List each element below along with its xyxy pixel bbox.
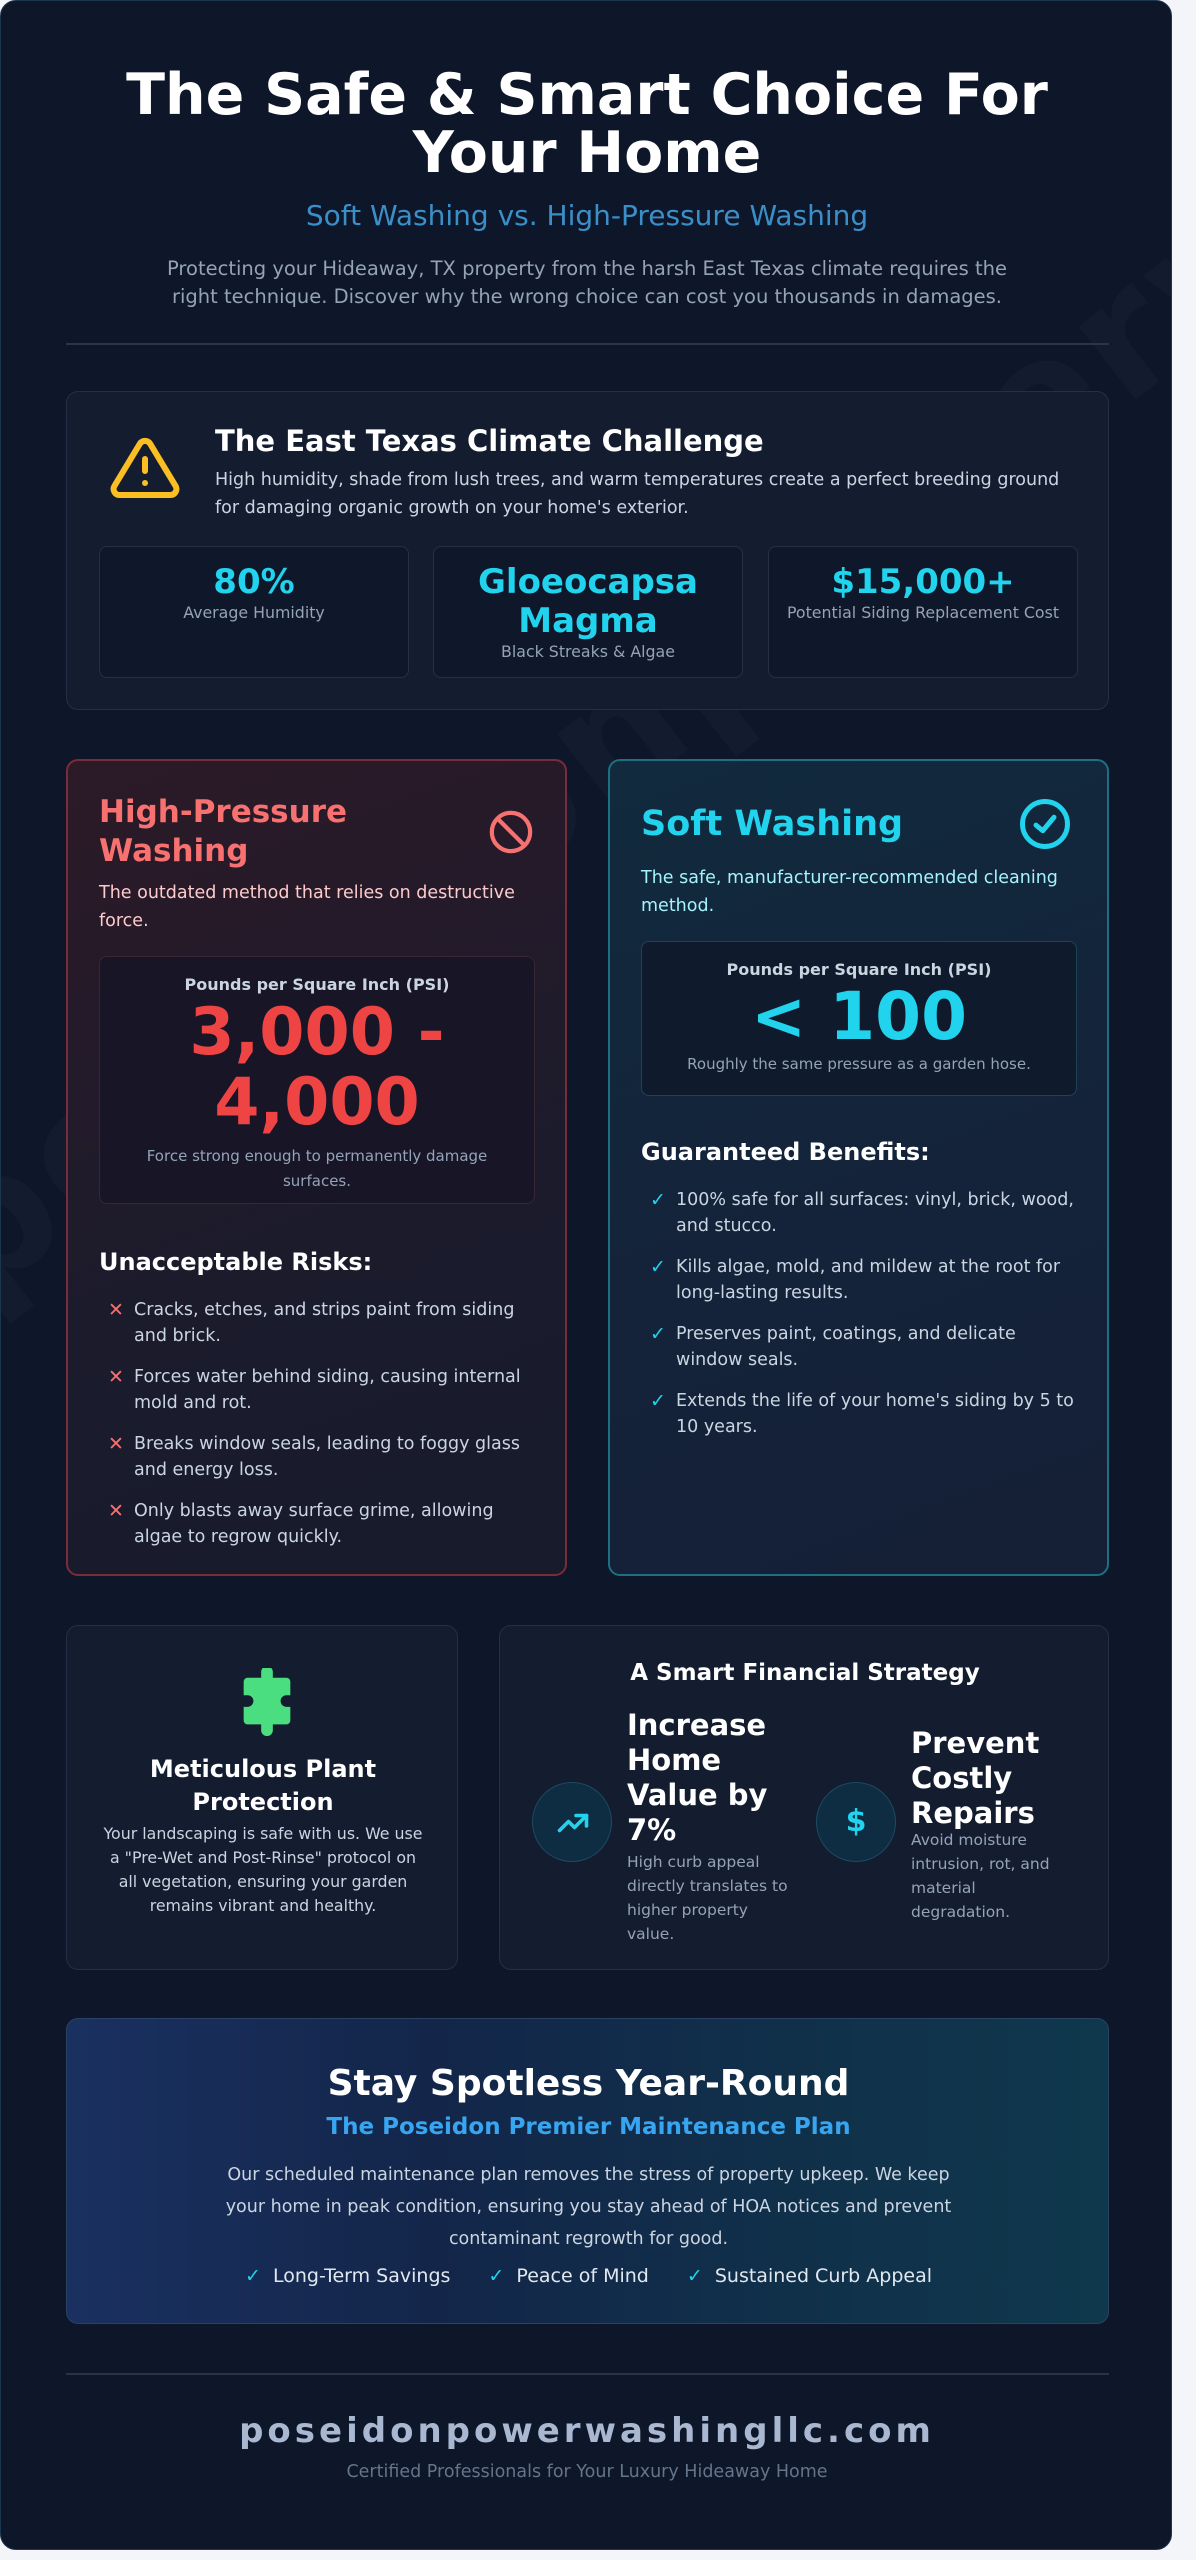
- panel: plant protection: [66, 1625, 458, 1970]
- icon: ban: [490, 810, 532, 854]
- intro paragraph: Protecting your Hideaway, TX property from the harsh East Texas climate requires the right technique. Discover why the wrong choice can cost you thousands in damages.: [167, 257, 1007, 308]
- heading: Meticulous Plant: [150, 1755, 376, 1783]
- benefits list: ✓: [650, 1189, 666, 1211]
- PSI box: [99, 956, 535, 1204]
- risks list: Only blasts away surface grime, allowing algae to regrow quickly.: [134, 1501, 494, 1547]
- benefits list: ✓: [650, 1256, 666, 1278]
- PSI box: Force strong enough to permanently damage surfaces.: [147, 1147, 487, 1190]
- panel: financial strategy: [499, 1625, 1109, 1970]
- benefits checks: ✓ Peace of Mind: [488, 2265, 649, 2287]
- item: increase value: Increase Home Value by 7%: [627, 1708, 767, 1847]
- benefits checks: ✓ Long-Term Savings: [245, 2265, 450, 2287]
- risks list: Breaks window seals, leading to foggy glass and energy loss.: [134, 1434, 520, 1480]
- icon: puzzle: [244, 1668, 290, 1736]
- benefits heading: Guaranteed Benefits:: [641, 1138, 930, 1166]
- benefits list: ✓: [650, 1390, 666, 1412]
- stat: humidity: 80%: [213, 562, 295, 602]
- icon: dollar: $: [846, 1804, 866, 1839]
- description: The outdated method that relies on destructive force.: [99, 883, 515, 931]
- item: prevent repairs: [816, 1726, 1050, 1921]
- benefits list: 100% safe for all surfaces: vinyl, brick, wood, and stucco.: [676, 1190, 1074, 1236]
- item: increase value: High curb appeal directly translates to higher property value.: [627, 1853, 788, 1943]
- heading: Stay Spotless Year-Round: [328, 2063, 849, 2104]
- benefits checks: ✓ Sustained Curb Appeal: [687, 2265, 932, 2287]
- title: Your Home: [413, 120, 761, 186]
- heading: High-Pressure: [99, 794, 347, 830]
- description: The safe, manufacturer-recommended cleaning method.: [641, 868, 1058, 916]
- risks list: ✕: [108, 1433, 124, 1455]
- risks list: ✕: [108, 1366, 124, 1388]
- icon: warning: [110, 438, 180, 498]
- item: prevent repairs: Avoid moisture intrusion, rot, and material degradation.: [911, 1831, 1050, 1921]
- title: The Safe & Smart Choice For: [126, 62, 1048, 128]
- footer website: poseidonpowerwashingllc.com: [239, 2411, 935, 2451]
- description: High humidity, shade from lush trees, and warm temperatures create a perfect breeding ground for damaging organic growth on your home's exterior.: [215, 470, 1059, 518]
- benefits list: Extends the life of your home's siding by 5 to 10 years.: [676, 1391, 1074, 1437]
- panel: high-pressure washing: [66, 759, 567, 1576]
- stat: cost: $15,000+: [831, 562, 1015, 602]
- risks list: ✕: [108, 1500, 124, 1522]
- subtitle: Soft Washing vs. High-Pressure Washing: [306, 199, 868, 232]
- PSI box: 3,000 -: [189, 995, 445, 1070]
- item: increase value: [532, 1708, 788, 1943]
- heading: A Smart Financial Strategy: [630, 1660, 980, 1686]
- heading: Soft Washing: [641, 804, 903, 844]
- heading: Protection: [192, 1788, 334, 1816]
- benefits list: ✓: [650, 1323, 666, 1345]
- stat: humidity: [99, 546, 409, 678]
- PSI box: Roughly the same pressure as a garden hose.: [687, 1055, 1031, 1073]
- PSI box: < 100: [751, 978, 967, 1055]
- stat: cost: [768, 546, 1078, 678]
- PSI box: Pounds per Square Inch (PSI): [727, 960, 991, 979]
- panel: climate challenge: [66, 391, 1109, 710]
- risks heading: Unacceptable Risks:: [99, 1248, 372, 1276]
- PSI box: Pounds per Square Inch (PSI): [185, 975, 449, 994]
- risks list: ✕: [108, 1299, 124, 1321]
- stat: gloeocapsa: Gloeocapsa: [478, 562, 698, 602]
- panel: soft washing: [608, 759, 1109, 1576]
- title: [126, 62, 1048, 186]
- PSI box: [641, 941, 1077, 1096]
- benefits checks: [245, 2265, 932, 2287]
- icon: trend up: [532, 1782, 612, 1862]
- paragraph: Our scheduled maintenance plan removes the stress of property upkeep. We keep your home in peak condition, ensuring you stay ahead of HOA notices and prevent contaminant regrowth for good.: [226, 2165, 951, 2249]
- stat: humidity: Average Humidity: [183, 603, 325, 622]
- description: Your landscaping is safe with us. We use a "Pre-Wet and Post-Rinse" protocol on all vegetation, ensuring your garden remains vibrant and healthy.: [104, 1824, 422, 1915]
- stat: gloeocapsa: Black Streaks & Algae: [501, 642, 675, 661]
- stat: cost: Potential Siding Replacement Cost: [787, 603, 1059, 622]
- heading: [99, 794, 347, 869]
- benefits list: Kills algae, mold, and mildew at the root for long-lasting results.: [676, 1257, 1060, 1303]
- benefits list: Preserves paint, coatings, and delicate window seals.: [676, 1324, 1016, 1370]
- PSI box: 4,000: [214, 1065, 420, 1140]
- risks list: Cracks, etches, and strips paint from siding and brick.: [134, 1300, 514, 1346]
- footer tagline: Certified Professionals for Your Luxury Hideaway Home: [346, 2462, 828, 2482]
- heading: Washing: [99, 833, 248, 869]
- stat: gloeocapsa: Magma: [518, 601, 658, 641]
- panel: maintenance plan CTA: [66, 2018, 1109, 2324]
- stat: gloeocapsa: [433, 546, 743, 678]
- risks list: [108, 1299, 521, 1547]
- risks list: Forces water behind siding, causing internal mold and rot.: [134, 1367, 521, 1413]
- heading: [150, 1755, 376, 1816]
- subheading: The Poseidon Premier Maintenance Plan: [326, 2114, 851, 2140]
- item: prevent repairs: Prevent Costly Repairs: [911, 1726, 1039, 1830]
- benefits list: [650, 1189, 1074, 1437]
- icon: check circle: [1020, 799, 1070, 849]
- icon: dollar: [816, 1782, 896, 1862]
- heading: The East Texas Climate Challenge: [215, 424, 764, 458]
